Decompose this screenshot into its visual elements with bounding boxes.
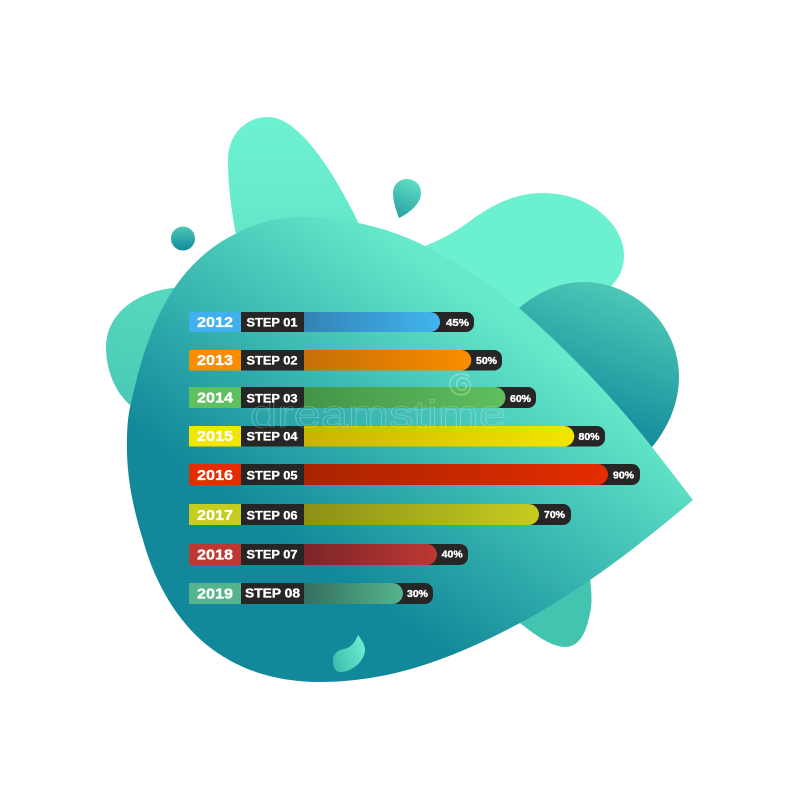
watermark (250, 374, 506, 436)
bar row: 2012 step 01 45%: 2012 (197, 315, 233, 331)
main teardrop panel (127, 217, 693, 682)
icon: leaf drop (333, 635, 365, 672)
bar row: 2017 step 06 70%: STEP 06 (246, 508, 298, 522)
bar row: 2018 step 07 40%: 40% (442, 550, 463, 560)
bar row: 2019 step 08 30%: STEP 08 (245, 585, 300, 600)
bar row: 2016 step 05 90%: 2016 (197, 468, 233, 484)
bar row: 2013 step 02 50% (189, 350, 502, 370)
bar row: 2017 step 06 70% (189, 504, 571, 525)
bar row: 2012 step 01 45%: STEP 01 (246, 316, 298, 330)
icon: water drop (393, 179, 421, 218)
bar row: 2014 step 03 60%: STEP 03 (246, 392, 298, 406)
bar row: 2015 step 04 80%: 80% (578, 432, 600, 443)
bar row: 2019 step 08 30%: 2019 (197, 587, 233, 603)
bar row: 2014 step 03 60% (189, 387, 536, 408)
bar row: 2014 step 03 60%: 2014 (197, 390, 233, 406)
bar row: 2012 step 01 45% (189, 312, 474, 332)
bar row: 2018 step 07 40%: 2018 (197, 548, 233, 564)
bar row: 2013 step 02 50%: 2013 (197, 353, 233, 369)
bar row: 2017 step 06 70%: 70% (544, 510, 565, 521)
blob: dark teal circle at right (505, 282, 679, 447)
bar row: 2015 step 04 80%: 2015 (197, 429, 233, 445)
bar row: 2016 step 05 90%: 90% (613, 470, 634, 482)
bar row: 2017 step 06 70%: 2017 (197, 508, 233, 524)
bar row: 2013 step 02 50%: 50% (476, 356, 497, 367)
watermark: dreamstime (250, 394, 506, 436)
bar row: 2019 step 08 30%: 30% (407, 589, 428, 600)
background blob lobes (106, 117, 624, 647)
bar row: 2014 step 03 60%: 60% (510, 394, 531, 405)
bar row: 2016 step 05 90%: STEP 05 (246, 468, 298, 482)
bar row: 2019 step 08 30% (189, 583, 433, 604)
bar row: 2016 step 05 90% (189, 464, 640, 485)
bar row: 2012 step 01 45%: 45% (446, 317, 470, 329)
bar row: 2018 step 07 40% (189, 544, 468, 565)
bar row: 2018 step 07 40%: STEP 07 (246, 548, 298, 562)
bar row: 2013 step 02 50%: STEP 02 (246, 354, 298, 368)
bar row: 2015 step 04 80%: STEP 04 (246, 430, 298, 444)
bar row: 2015 step 04 80% (189, 426, 605, 446)
icon: small round drop (171, 226, 195, 250)
